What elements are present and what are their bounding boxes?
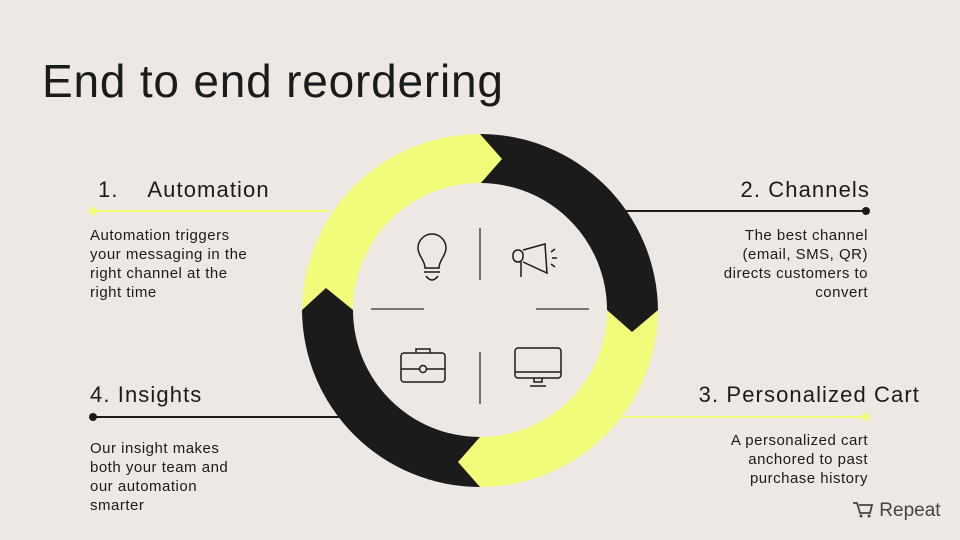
text: right time <box>90 284 157 301</box>
logo <box>853 500 941 521</box>
panel: insights: 4. Insights <box>90 382 202 407</box>
icon: monitor <box>515 348 561 386</box>
text: smarter <box>90 497 144 514</box>
icon: megaphone <box>513 244 557 277</box>
text: purchase history <box>750 470 868 487</box>
text: The best channel <box>745 227 868 244</box>
title: End to end reordering <box>42 55 504 107</box>
panel: automation: 1. Automation <box>98 177 270 202</box>
ring <box>302 134 658 487</box>
text: directs customers to <box>724 265 868 282</box>
icon: lightbulb <box>418 234 446 280</box>
panel: channels: 2. Channels <box>740 177 870 202</box>
text: Our insight makes <box>90 440 219 457</box>
text: right channel at the <box>90 265 228 282</box>
text: both your team and <box>90 459 228 476</box>
text: anchored to past <box>748 451 868 468</box>
text: (email, SMS, QR) <box>742 246 868 263</box>
text: A personalized cart <box>731 432 868 449</box>
icon: briefcase <box>401 349 445 382</box>
text: Automation triggers <box>90 227 230 244</box>
text: our automation <box>90 478 197 495</box>
text: convert <box>815 284 868 301</box>
logo: Repeat <box>879 500 941 521</box>
panel: personalized cart: 3. Personalized Cart <box>699 382 920 407</box>
text: your messaging in the <box>90 246 247 263</box>
